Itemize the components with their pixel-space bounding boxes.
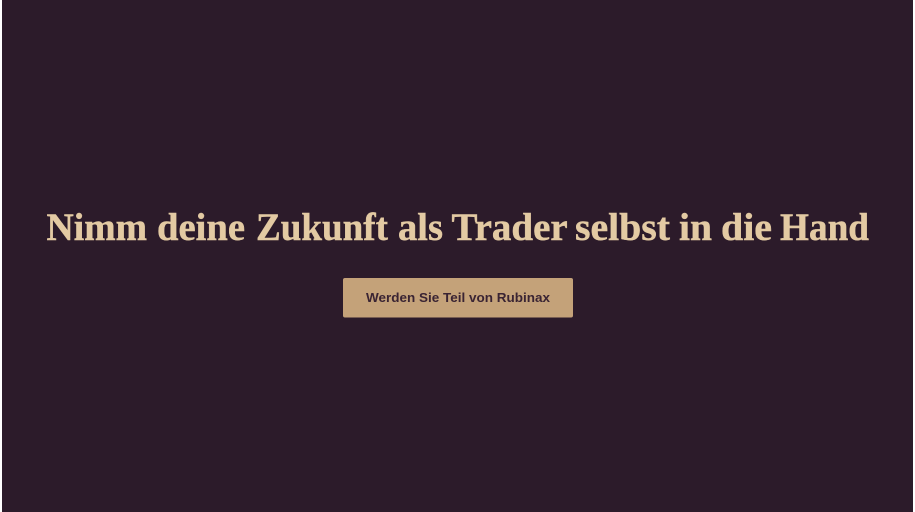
title: Hand [780,205,869,249]
title: als [398,205,443,249]
title: in [679,205,712,249]
title: Nimm [46,205,147,249]
title: die [721,205,772,249]
title: Trader [452,205,567,249]
button background [343,278,573,318]
title: selbst [575,205,670,249]
title: deine [157,205,245,249]
title: Zukunft [256,205,388,249]
button label: Werden Sie Teil von Rubinax [366,290,551,305]
button: join Rubinax [343,278,573,318]
